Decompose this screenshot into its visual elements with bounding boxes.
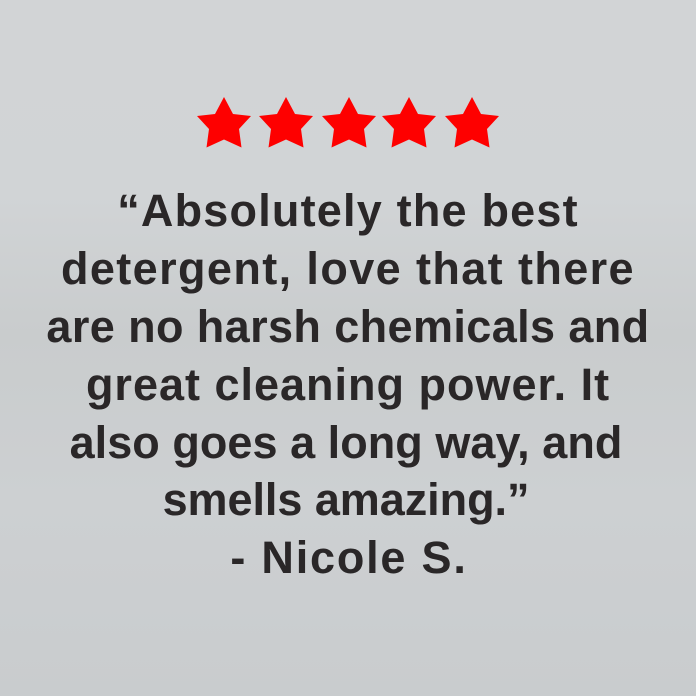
- star rating: [197, 97, 499, 148]
- review quote: also goes a long way, and: [70, 417, 622, 468]
- review quote: great cleaning power. It: [86, 359, 610, 410]
- review quote: - Nicole S.: [230, 532, 468, 583]
- review quote: “Absolutely the best: [117, 185, 579, 236]
- review quote: detergent, love that there: [61, 243, 635, 294]
- review quote: are no harsh chemicals and: [46, 301, 650, 352]
- review quote: smells amazing.”: [163, 474, 529, 525]
